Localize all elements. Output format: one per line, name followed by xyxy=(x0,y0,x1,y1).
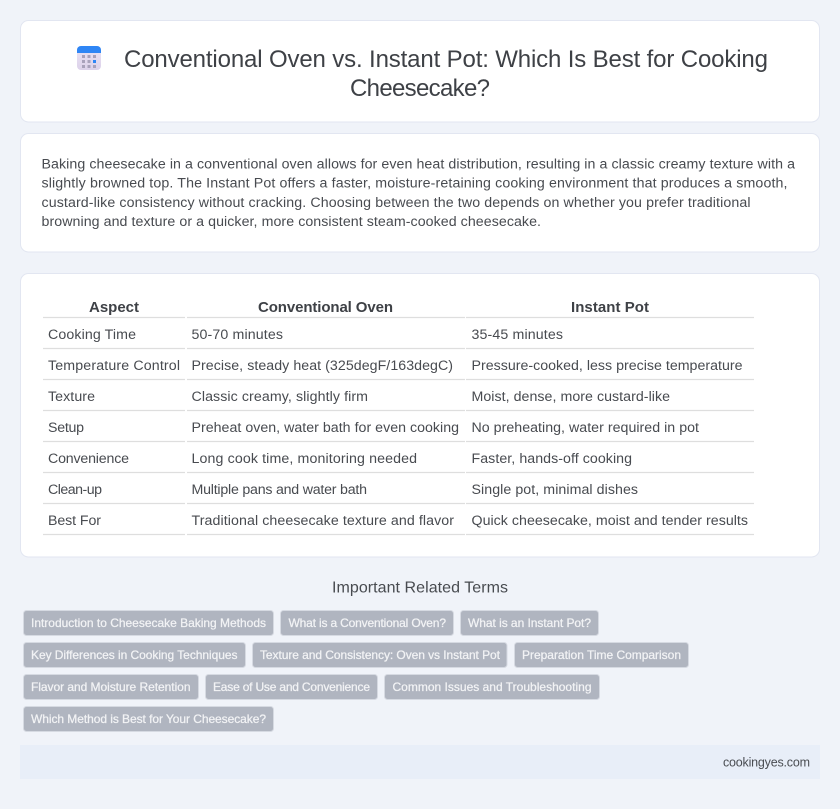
tag: preparation time xyxy=(514,642,688,668)
row: texture: Texture xyxy=(48,389,95,405)
tag: ease of use: Ease of Use and Convenience xyxy=(213,680,370,694)
tag: which method xyxy=(24,706,274,732)
footer bar: cookingyes.com xyxy=(723,756,810,770)
row: best for: Quick cheesecake, moist and tender results xyxy=(472,513,748,529)
tag: texture and consistency: Texture and Consistency: Oven vs Instant Pot xyxy=(260,648,501,662)
tag: which method: Which Method is Best for Your Cheesecake? xyxy=(31,712,266,726)
tag: common issues xyxy=(384,674,600,700)
row: best for: Traditional cheesecake texture and flavor xyxy=(192,513,454,529)
tag: texture and consistency xyxy=(252,642,507,668)
tag: instant pot: What is an Instant Pot? xyxy=(468,616,591,630)
row: setup: No preheating, water required in pot xyxy=(472,420,699,436)
row: convenience: Long cook time, monitoring needed xyxy=(192,451,417,467)
row: clean-up: Clean-up xyxy=(48,482,102,498)
row: clean-up: Multiple pans and water bath xyxy=(192,482,367,498)
row: texture xyxy=(43,389,754,410)
row: cooking time: Cooking Time xyxy=(48,327,136,343)
title: Cheesecake? xyxy=(350,75,490,102)
tag: introduction xyxy=(24,610,274,636)
row: cooking time xyxy=(43,327,754,348)
row: setup xyxy=(43,420,754,442)
row: setup: Preheat oven, water bath for even cooking xyxy=(192,420,459,436)
row: temperature control: Pressure-cooked, less precise temperature xyxy=(472,358,743,374)
panel: introduction text: slightly browned top. The Instant Pot offers a faster, moisture-retaining cooking environment that produces a smooth, xyxy=(42,176,788,192)
tag: instant pot xyxy=(460,610,598,636)
row: temperature control xyxy=(43,358,754,380)
row: cooking time: 35-45 minutes xyxy=(472,327,563,343)
tag: ease of use xyxy=(206,674,378,700)
tag: flavor and moisture: Flavor and Moisture Retention xyxy=(31,680,190,694)
row: texture: Moist, dense, more custard-like xyxy=(472,389,670,405)
row: convenience xyxy=(43,451,754,472)
tag: key differences: Key Differences in Cooking Techniques xyxy=(31,648,238,662)
row: temperature control: Temperature Control xyxy=(48,358,180,374)
row: cooking time: 50-70 minutes xyxy=(192,327,283,343)
panel: introduction text: browning and texture or a quicker, more consistent steam-cooked cheesecake. xyxy=(42,214,541,230)
title xyxy=(124,46,768,102)
tag: introduction: Introduction to Cheesecake Baking Methods xyxy=(31,616,266,630)
footer bar xyxy=(20,745,820,779)
row: convenience: Convenience xyxy=(48,451,129,467)
panel: comparison table xyxy=(20,274,820,557)
table header row xyxy=(43,299,754,318)
row: best for xyxy=(43,513,754,534)
row: convenience: Faster, hands-off cooking xyxy=(472,451,632,467)
heading: important related terms: Important Related Terms xyxy=(332,580,508,596)
tag: conventional oven: What is a Conventional Oven? xyxy=(288,616,446,630)
related term tags xyxy=(24,610,688,732)
panel: introduction text: Baking cheesecake in a conventional oven allows for even heat distribution, resulting in a classic creamy texture with a xyxy=(42,156,795,172)
tag: conventional oven xyxy=(280,610,454,636)
row: texture: Classic creamy, slightly firm xyxy=(192,389,368,405)
row: temperature control: Precise, steady heat (325degF/163degC) xyxy=(192,358,453,374)
row: best for: Best For xyxy=(48,513,101,529)
panel: title header xyxy=(20,20,820,122)
icon: calendar xyxy=(77,46,101,70)
table header row: Conventional Oven xyxy=(258,299,393,316)
panel: introduction text xyxy=(20,134,820,252)
tag: flavor and moisture xyxy=(24,674,198,700)
table header row: Instant Pot xyxy=(571,299,649,316)
title: Conventional Oven vs. Instant Pot: Which Is Best for Cooking xyxy=(124,46,768,73)
panel: introduction text: custard-like consistency without cracking. Choosing between the two depends on whether you prefer traditional xyxy=(42,195,750,211)
table header row: Aspect xyxy=(89,299,139,316)
row: clean-up: Single pot, minimal dishes xyxy=(472,482,638,498)
row: setup: Setup xyxy=(48,420,84,436)
tag: common issues: Common Issues and Troubleshooting xyxy=(392,680,592,694)
tag: preparation time: Preparation Time Comparison xyxy=(522,648,681,662)
tag: key differences xyxy=(24,642,246,668)
row: clean-up xyxy=(43,482,754,504)
